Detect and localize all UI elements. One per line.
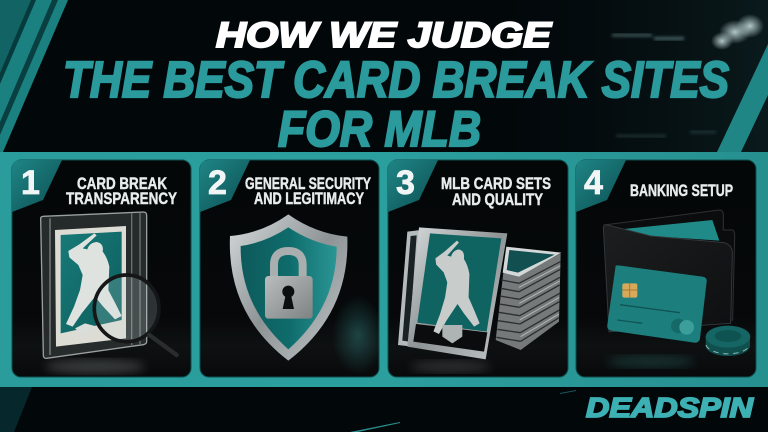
heading line 3: FOR MLB xyxy=(278,101,481,157)
heading 2: AND LEGITIMACY xyxy=(254,190,364,208)
panel 3: mlb card sets and quality xyxy=(388,160,568,377)
heading 1 xyxy=(66,175,177,208)
stadium lights xyxy=(612,14,764,137)
number badge 1: 1 xyxy=(21,164,40,202)
number badge 1 xyxy=(12,160,62,212)
panel 2: general security and legitimacy xyxy=(200,160,384,377)
number badge 2: 2 xyxy=(208,164,227,202)
teal band xyxy=(0,152,768,387)
icon: wallet with card and chips xyxy=(603,210,750,368)
logo: deadspin: DEADSPIN xyxy=(586,392,754,423)
panel 4: banking setup xyxy=(576,160,756,377)
diagonal accent stripe xyxy=(717,44,768,152)
heading line 1: HOW WE JUDGE xyxy=(216,16,553,55)
heading 3 xyxy=(441,175,551,209)
number badge 2 xyxy=(200,160,250,212)
icon: baseball cards and stack xyxy=(398,227,561,373)
number badge 4: 4 xyxy=(584,164,603,202)
panel 1: card break transparency xyxy=(12,160,191,377)
icon: graded card slab with magnifier xyxy=(41,212,177,374)
number badge 4 xyxy=(576,160,626,212)
icon: shield with padlock xyxy=(230,214,347,361)
heading 2: GENERAL SECURITY xyxy=(245,175,371,193)
heading 4: BANKING SETUP xyxy=(630,182,733,200)
heading 3: AND QUALITY xyxy=(452,191,543,209)
heading 3: MLB CARD SETS xyxy=(441,175,551,193)
heading 1: CARD BREAK xyxy=(77,175,167,193)
heading 1: TRANSPARENCY xyxy=(66,190,177,208)
number badge 3 xyxy=(388,160,438,212)
number badge 3: 3 xyxy=(396,164,415,202)
heading 2 xyxy=(245,175,371,208)
